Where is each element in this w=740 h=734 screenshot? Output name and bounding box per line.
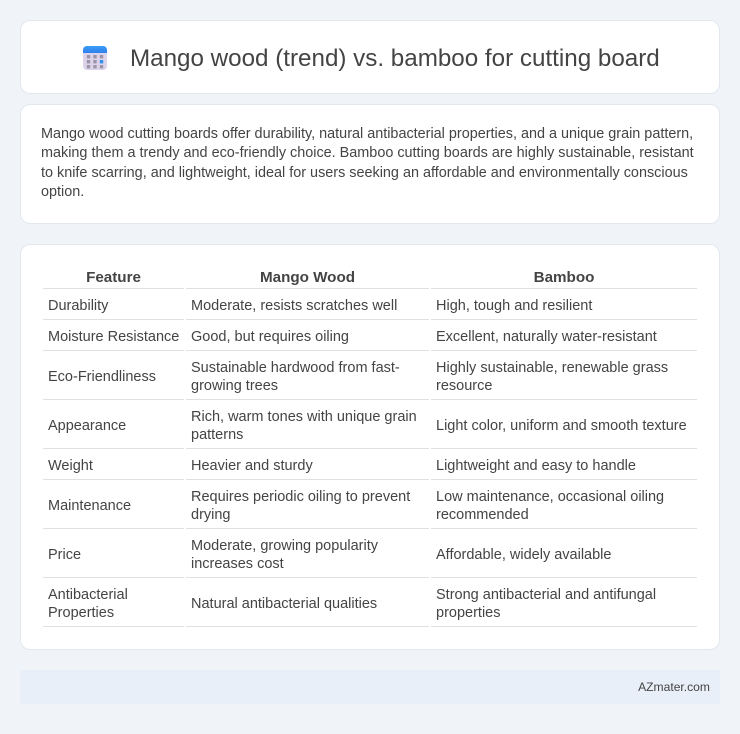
row: Maintenance: Low maintenance, occasional oiling (436, 489, 664, 505)
footer: source: AZmater.com (638, 680, 710, 694)
table header (86, 269, 594, 286)
title: Mango wood (trend) vs. bamboo for cutting board (130, 45, 660, 72)
text block: summary: option. (41, 184, 84, 200)
panel: comparison table (20, 244, 720, 650)
row: Eco-Friendliness: Highly sustainable, renewable grass (436, 360, 668, 376)
row: Durability (48, 298, 592, 314)
row: Appearance (48, 409, 687, 443)
row: Antibacterial Properties: Antibacterial (48, 587, 128, 603)
row: Durability: Moderate, resists scratches well (191, 298, 397, 314)
row: Moisture Resistance: Moisture Resistance (48, 329, 179, 345)
row: Antibacterial Properties: properties (436, 605, 500, 621)
table header: Mango Wood (260, 269, 355, 286)
row: Maintenance: drying (191, 507, 230, 523)
row: Moisture Resistance: Excellent, naturally water-resistant (436, 329, 657, 345)
text block: summary: making them a trendy and eco-friendly choice. Bamboo cutting boards are highly sustainable, resistant (41, 145, 694, 161)
row: Maintenance: Requires periodic oiling to prevent (191, 489, 410, 505)
text block: summary (41, 126, 694, 200)
row: Durability: High, tough and resilient (436, 298, 592, 314)
table header: Bamboo (534, 269, 594, 286)
row: Eco-Friendliness: Sustainable hardwood from fast- (191, 360, 400, 376)
panel: summary text (20, 104, 720, 224)
row: Moisture Resistance: Good, but requires oiling (191, 329, 349, 345)
row: Eco-Friendliness (48, 360, 668, 394)
footer bar (20, 670, 720, 704)
row: Maintenance (48, 489, 664, 523)
row: Weight: Heavier and sturdy (191, 458, 313, 474)
row: Eco-Friendliness: growing trees (191, 378, 278, 394)
row: Price: Affordable, widely available (436, 547, 611, 563)
row: Moisture Resistance (48, 329, 657, 345)
row: Antibacterial Properties (48, 587, 656, 621)
comparison table (43, 269, 697, 627)
table header: Feature (86, 269, 141, 286)
row: Eco-Friendliness: Eco-Friendliness (48, 369, 156, 385)
row: Maintenance: Maintenance (48, 498, 131, 514)
row: Price: Price (48, 547, 81, 563)
row: Weight: Lightweight and easy to handle (436, 458, 636, 474)
row: Weight (48, 458, 636, 474)
row: Weight: Weight (48, 458, 93, 474)
row: Appearance: Rich, warm tones with unique grain (191, 409, 417, 425)
row: Price (48, 538, 611, 572)
text block: summary: to knife scarring, and lightweight, ideal for users seeking an affordable and environmentally conscious (41, 165, 688, 181)
row: Maintenance: recommended (436, 507, 529, 523)
panel: title card (20, 20, 720, 94)
row: Price: increases cost (191, 556, 284, 572)
row: Appearance: patterns (191, 427, 243, 443)
text block: summary: Mango wood cutting boards offer durability, natural antibacterial properties, and a unique grain pattern, (41, 126, 693, 142)
row: Antibacterial Properties: Strong antibacterial and antifungal (436, 587, 656, 603)
row: Eco-Friendliness: resource (436, 378, 492, 394)
row: Durability: Durability (48, 298, 108, 314)
row: Appearance: Appearance (48, 418, 126, 434)
row: Appearance: Light color, uniform and smooth texture (436, 418, 687, 434)
icon: calendar (83, 46, 107, 70)
row: Price: Moderate, growing popularity (191, 538, 378, 554)
row: Antibacterial Properties: Natural antibacterial qualities (191, 596, 377, 612)
row: Antibacterial Properties: Properties (48, 605, 114, 621)
